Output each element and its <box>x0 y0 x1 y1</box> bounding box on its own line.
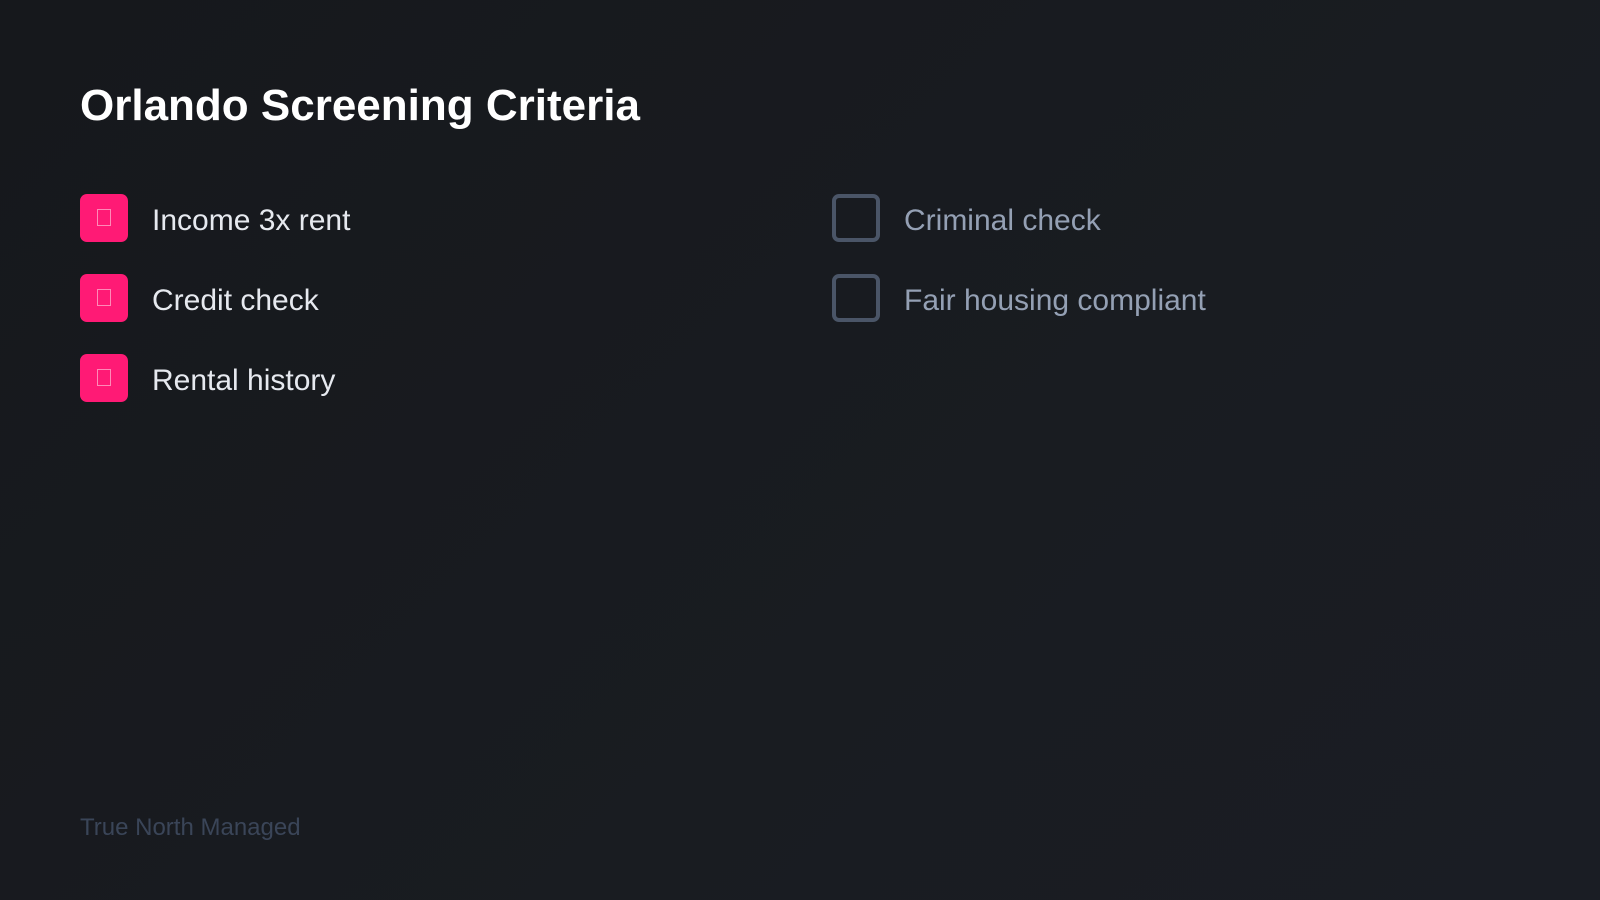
item: criminal <box>832 194 1101 242</box>
item: credit <box>80 274 319 322</box>
item: fair housing <box>832 274 1206 322</box>
item: rental history <box>80 354 336 402</box>
item: rental history: Rental history <box>152 364 335 397</box>
item: income <box>80 194 350 242</box>
item: fair housing: Fair housing compliant <box>904 284 1206 317</box>
footer: True North Managed <box>80 814 301 841</box>
item: credit: Credit check <box>152 284 319 317</box>
item: criminal: Criminal check <box>904 204 1101 237</box>
title: Orlando Screening Criteria <box>80 81 640 130</box>
item: income: Income 3x rent <box>152 204 350 237</box>
